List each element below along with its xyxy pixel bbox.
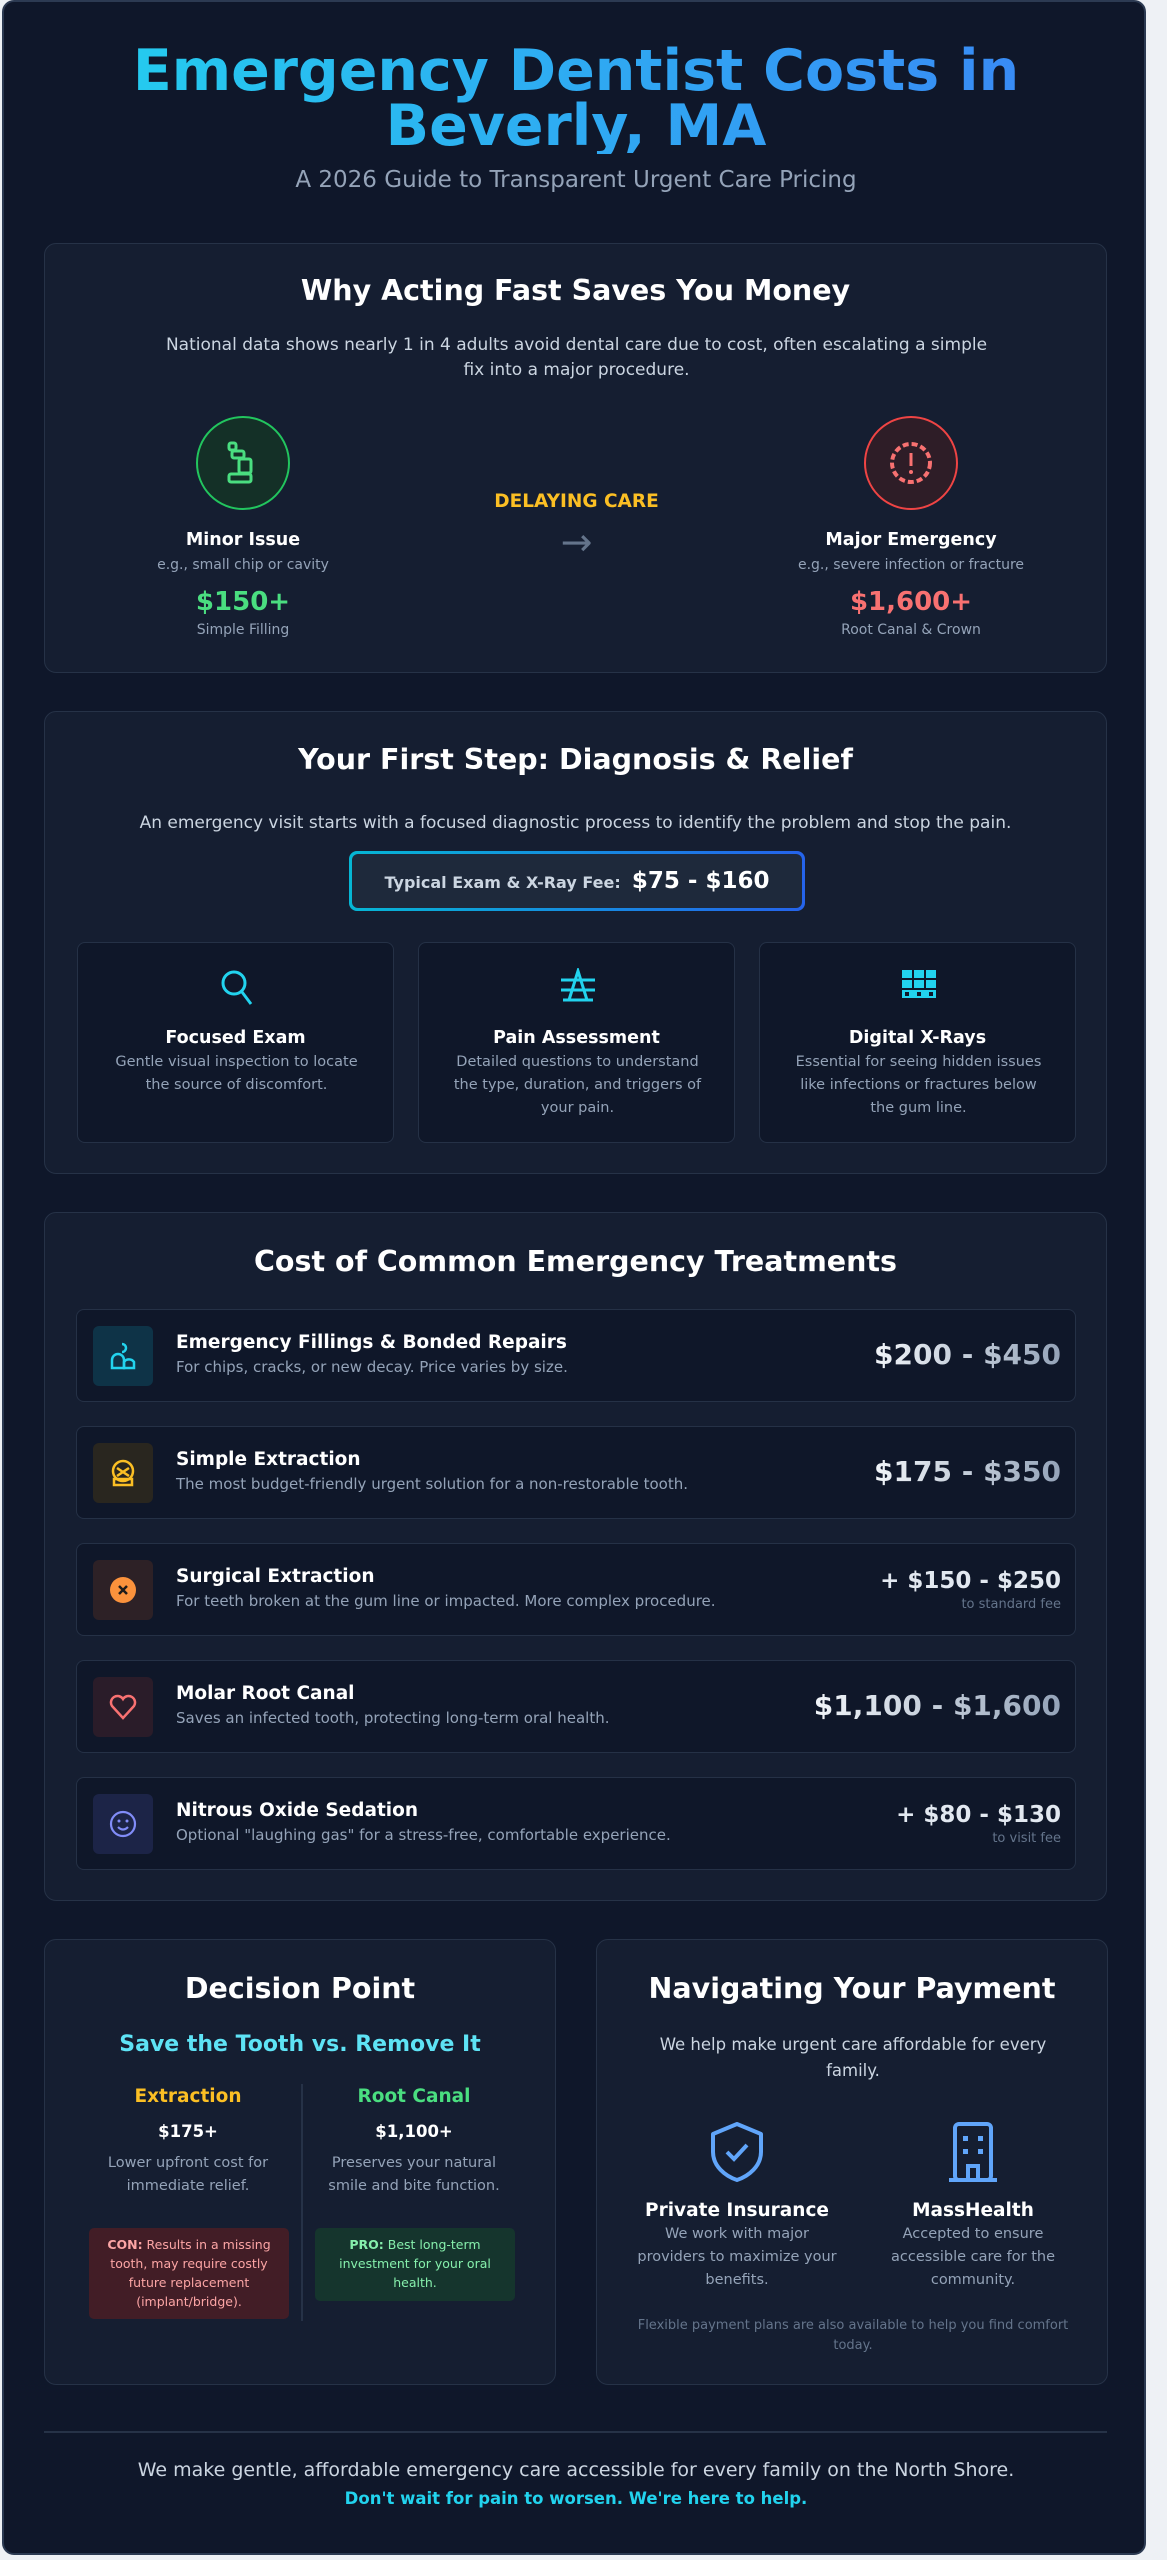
row: sedation xyxy=(76,1777,1076,1870)
minor issue column: Simple Filling xyxy=(197,622,289,638)
note xyxy=(638,2318,1068,2353)
row: sedation: to visit fee xyxy=(992,1831,1061,1846)
heading: Your First Step: Diagnosis & Relief xyxy=(298,743,853,776)
callout: exam fee: Typical Exam & X-Ray Fee: $75 - $160 xyxy=(385,868,769,894)
row: fillings: Emergency Fillings & Bonded Repairs xyxy=(176,1332,567,1353)
panel: decision point xyxy=(44,1939,556,2385)
heading: Decision Point xyxy=(185,1972,415,2005)
panel: why acting fast xyxy=(44,243,1107,673)
card: digital x-rays: Digital X-Rays xyxy=(849,1028,986,1048)
card: focused exam: Gentle visual inspection to locate the source of discomfort. xyxy=(115,1054,358,1093)
card: pain assessment xyxy=(418,942,735,1143)
minor issue column xyxy=(157,416,329,638)
column: root canal: Root Canal xyxy=(357,2086,470,2107)
icon: shield xyxy=(711,2122,763,2182)
text block: description: National data shows nearly 1 in 4 adults avoid dental care due to cost, often escalating a simple xyxy=(166,335,987,355)
row: fillings: $200 - $450 xyxy=(874,1338,1061,1371)
major emergency column: Major Emergency xyxy=(825,530,997,550)
footer call to action: Don't wait for pain to worsen. We're here to help. xyxy=(345,2489,807,2508)
column: root canal: Preserves your natural xyxy=(332,2155,496,2171)
icon: pain xyxy=(561,968,595,1002)
text: masshealth: Accepted to ensure accessible care for the community. xyxy=(891,2226,1055,2288)
icon: alert xyxy=(864,416,958,510)
panel: treatment costs xyxy=(44,1212,1107,1901)
title xyxy=(4,44,1148,154)
callout: con: CON: Results in a missing tooth, may require costly future replacement (implant/bridge). xyxy=(107,2237,271,2309)
row: fillings: For chips, cracks, or new decay. Price varies by size. xyxy=(176,1358,568,1376)
card: focused exam xyxy=(77,942,394,1143)
row: root canal: Saves an infected tooth, protecting long-term oral health. xyxy=(176,1709,610,1727)
text block: family. xyxy=(826,2061,880,2080)
note: today. xyxy=(833,2338,873,2353)
row: sedation: Optional "laughing gas" for a stress-free, comfortable experience. xyxy=(176,1826,671,1844)
row: simple extraction: Simple Extraction xyxy=(176,1449,361,1470)
row: simple extraction xyxy=(76,1426,1076,1519)
callout: pro: PRO: Best long-term investment for your oral health. xyxy=(339,2237,491,2290)
icon: magnifier xyxy=(222,970,252,1005)
major emergency column: Root Canal & Crown xyxy=(841,622,981,638)
heading: Why Acting Fast Saves You Money xyxy=(301,274,850,307)
icon: building xyxy=(949,2122,997,2182)
row: simple extraction: The most budget-friendly urgent solution for a non-restorable tooth. xyxy=(176,1475,688,1493)
row: root canal: $1,100 - $1,600 xyxy=(814,1689,1061,1722)
panel: diagnosis xyxy=(44,711,1107,1174)
text: private insurance: We work with major providers to maximize your benefits. xyxy=(637,2226,837,2288)
heading: Cost of Common Emergency Treatments xyxy=(254,1245,897,1278)
text block: description: fix into a major procedure. xyxy=(463,360,690,380)
column: root canal: $1,100+ xyxy=(375,2122,453,2141)
price: $150+ xyxy=(196,587,290,617)
column: extraction xyxy=(89,2086,289,2319)
row: sedation: Nitrous Oxide Sedation xyxy=(176,1800,418,1821)
divider line xyxy=(301,2084,302,2321)
row: surgical extraction: Surgical Extraction xyxy=(176,1566,374,1587)
title: Beverly, MA xyxy=(386,93,766,159)
callout: pro xyxy=(315,2228,515,2301)
subtitle: A 2026 Guide to Transparent Urgent Care Pricing xyxy=(295,167,857,193)
row: surgical extraction xyxy=(76,1543,1076,1636)
icon: grid xyxy=(902,970,936,998)
panel: payment xyxy=(596,1939,1108,2385)
arrow: delaying care: → xyxy=(561,520,592,564)
heading: Navigating Your Payment xyxy=(649,1972,1055,2005)
callout: exam fee xyxy=(349,851,805,911)
column: root canal: smile and bite function. xyxy=(328,2178,500,2194)
arrow: delaying care: DELAYING CARE xyxy=(494,491,659,512)
column: extraction: immediate relief. xyxy=(127,2178,249,2194)
text block xyxy=(660,2035,1046,2080)
minor issue column: e.g., small chip or cavity xyxy=(157,557,329,573)
text: masshealth: MassHealth xyxy=(912,2200,1034,2221)
row: sedation: + $80 - $130 xyxy=(896,1802,1061,1828)
column: root canal xyxy=(315,2086,515,2301)
row: root canal xyxy=(76,1660,1076,1753)
major emergency column xyxy=(798,416,1024,638)
icon: minor tooth xyxy=(196,416,290,510)
text: private insurance: Private Insurance xyxy=(645,2200,829,2221)
title: Emergency Dentist Costs in xyxy=(133,38,1019,104)
footer text: We make gentle, affordable emergency care accessible for every family on the North Shore. xyxy=(138,2459,1014,2481)
card: focused exam: Focused Exam xyxy=(165,1028,306,1048)
row: surgical extraction: For teeth broken at the gum line or impacted. More complex procedure. xyxy=(176,1592,716,1610)
row: fillings xyxy=(76,1309,1076,1402)
card: pain assessment: Pain Assessment xyxy=(493,1028,660,1048)
label: Minor Issue xyxy=(186,530,300,550)
row: root canal: Molar Root Canal xyxy=(176,1683,355,1704)
callout: con xyxy=(89,2228,289,2319)
text block: We help make urgent care affordable for every xyxy=(660,2035,1046,2054)
major emergency column: e.g., severe infection or fracture xyxy=(798,557,1024,573)
text block: An emergency visit starts with a focused diagnostic process to identify the problem and stop the pain. xyxy=(140,813,1011,833)
row: surgical extraction: + $150 - $250 xyxy=(880,1568,1061,1594)
column: extraction: Extraction xyxy=(134,2086,242,2107)
text block: description xyxy=(166,335,987,380)
card: digital x-rays xyxy=(759,942,1076,1143)
card: digital x-rays: Essential for seeing hidden issues like infections or fractures below the gum line. xyxy=(796,1054,1041,1116)
row: surgical extraction: to standard fee xyxy=(961,1597,1061,1612)
major emergency column: $1,600+ xyxy=(850,587,972,617)
subheading: Save the Tooth vs. Remove It xyxy=(119,2032,481,2057)
note: Flexible payment plans are also available to help you find comfort xyxy=(638,2318,1068,2333)
card: pain assessment: Detailed questions to understand the type, duration, and triggers of your pain. xyxy=(454,1054,701,1116)
column: extraction: Lower upfront cost for xyxy=(108,2155,268,2171)
row: simple extraction: $175 - $350 xyxy=(874,1455,1061,1488)
arrow: delaying care xyxy=(494,491,659,564)
column: extraction: $175+ xyxy=(158,2122,218,2141)
